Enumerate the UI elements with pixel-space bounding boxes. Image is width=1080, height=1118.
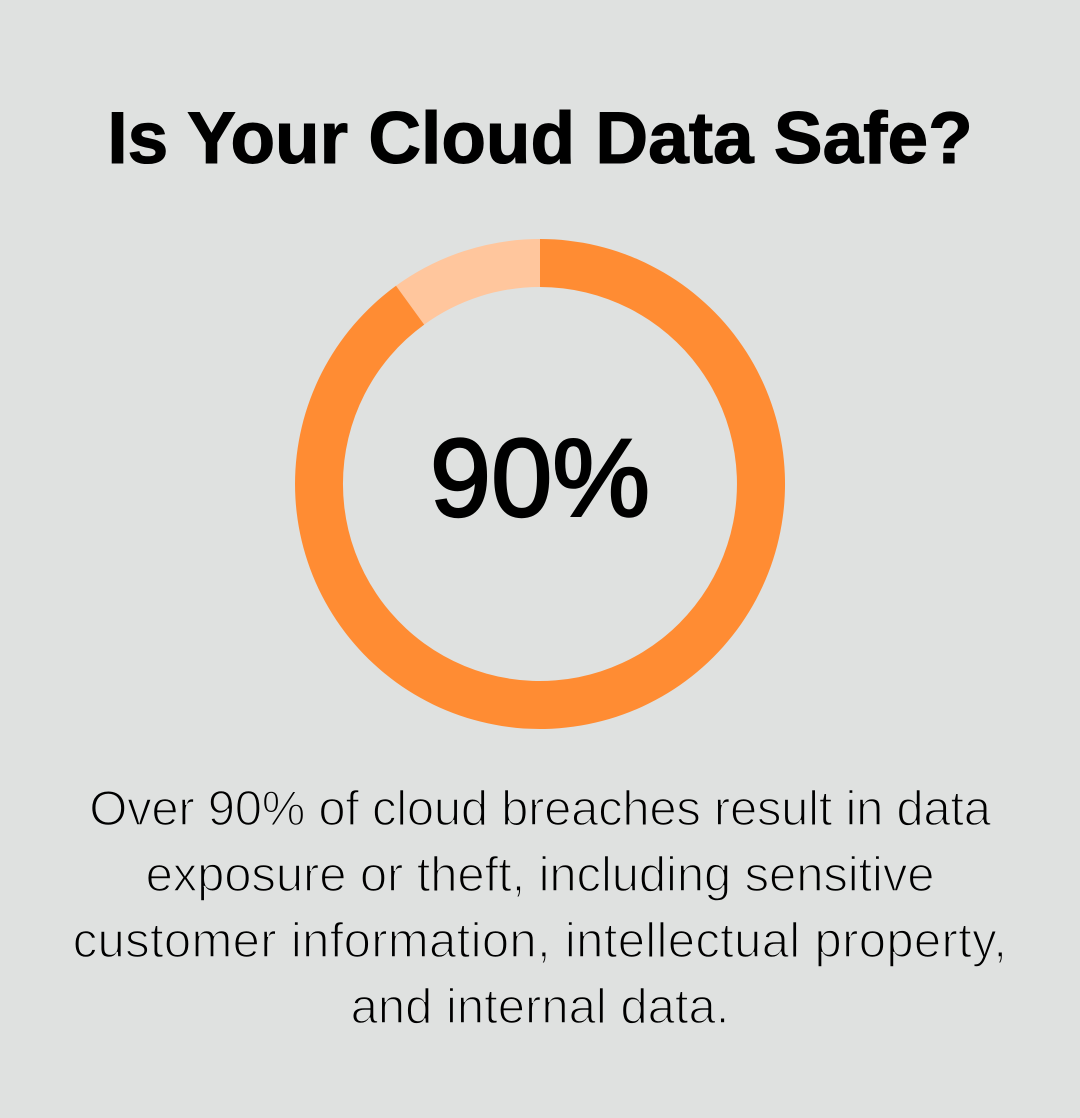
donut main segment [295, 239, 785, 729]
description text: and internal data. [351, 980, 729, 1034]
description text: customer information, intellectual property, [73, 914, 1007, 968]
donut remainder segment [396, 239, 540, 325]
description text: exposure or theft, including sensitive [146, 848, 934, 902]
description text: Over 90% of cloud breaches result in data [89, 782, 991, 836]
description text [73, 782, 1007, 1034]
center value: 90% [430, 417, 650, 540]
title: Is Your Cloud Data Safe? [107, 98, 973, 179]
